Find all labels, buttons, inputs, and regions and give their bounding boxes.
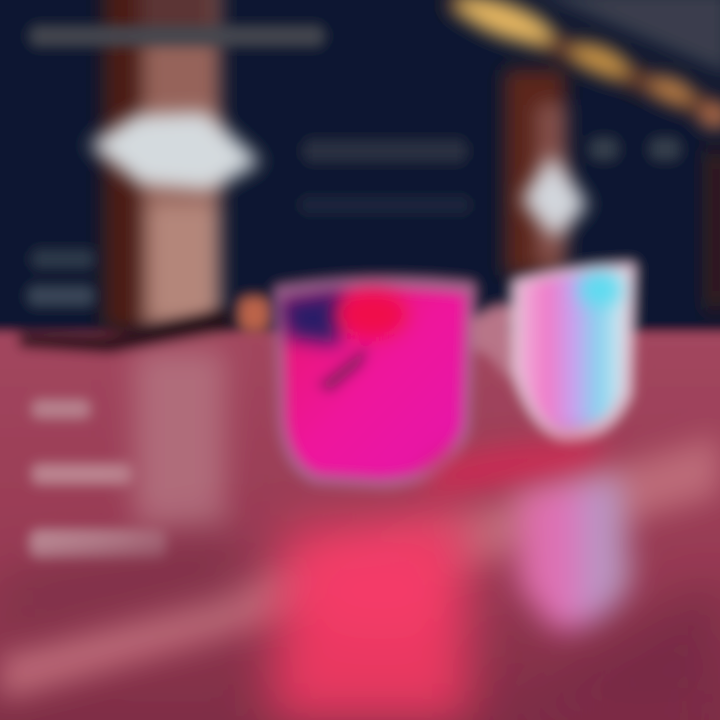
left lens [280, 289, 466, 478]
string of warm lights [450, 0, 720, 128]
top right grey corner [530, 0, 720, 75]
blurred text: right chips [590, 138, 680, 160]
blurred text: middle line [304, 140, 466, 162]
blurred text: lower middle line [300, 197, 470, 213]
glasses frame [238, 262, 636, 488]
lower right dark surface [500, 580, 720, 720]
pale section of surface under left pillar [135, 350, 225, 530]
dark horizon band [20, 308, 232, 352]
diagonal pink band on surface [0, 435, 720, 700]
far right pillar [706, 150, 720, 310]
white blob on left pillar [90, 112, 260, 190]
lower left dark surface [0, 530, 240, 635]
right lens [520, 272, 626, 430]
blurred text: lower left block [30, 400, 166, 558]
blurred text: top heading [30, 26, 324, 46]
left lens reflection [270, 510, 470, 720]
blurred text: left block [28, 250, 94, 306]
right pillar [505, 70, 566, 275]
background: pink surface [0, 332, 720, 720]
sunglasses [238, 262, 636, 488]
left pillar [104, 0, 220, 330]
background: dark backdrop [0, 0, 720, 340]
white blob on right pillar [522, 155, 587, 238]
glow beneath glasses [420, 442, 610, 495]
right lens cyan highlight [578, 274, 622, 306]
right lens reflection [518, 475, 632, 630]
